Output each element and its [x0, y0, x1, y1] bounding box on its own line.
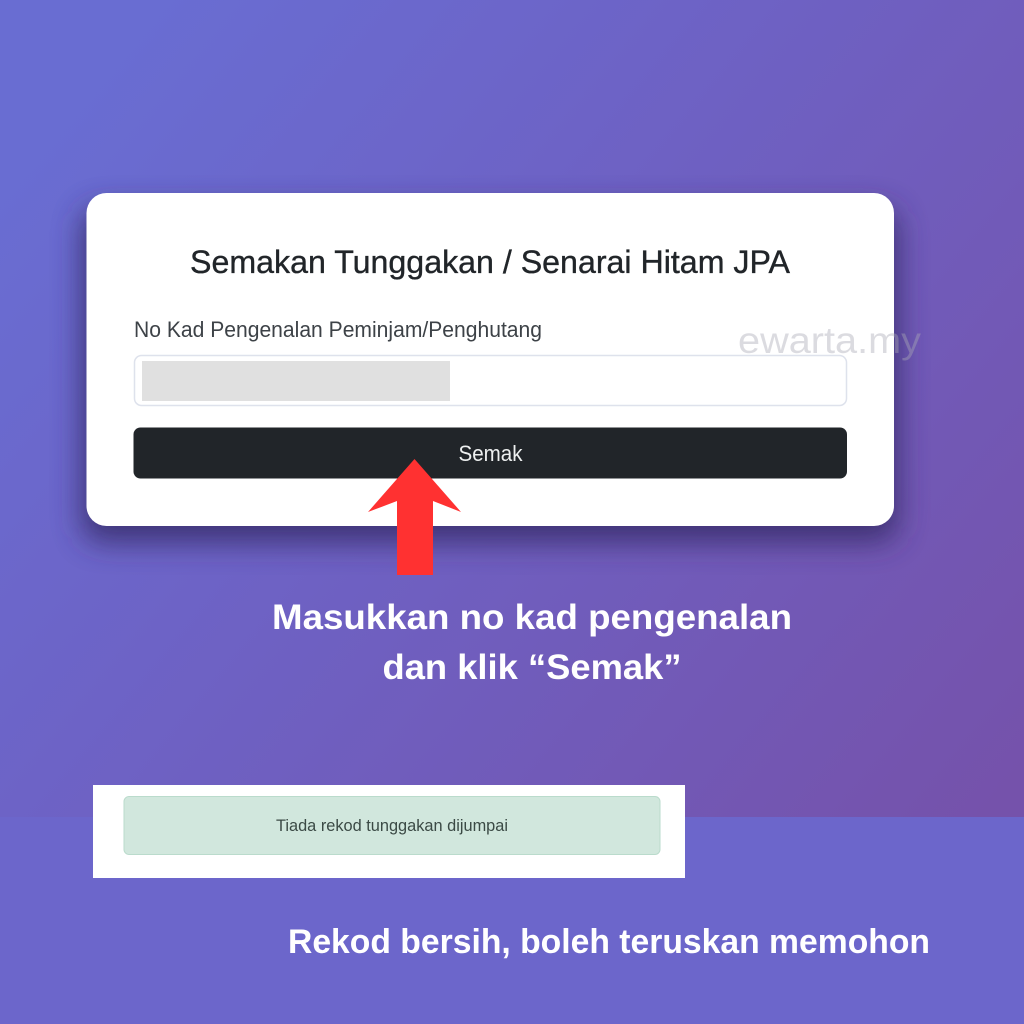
background lower band	[0, 817, 1024, 1024]
result message: Tiada rekod tunggakan dijumpai	[276, 817, 508, 835]
conclusion text: Rekod bersih, boleh teruskan memohon	[288, 923, 930, 961]
label: IC number: No Kad Pengenalan Peminjam/Penghutang	[134, 317, 542, 342]
button: Semak: Semak	[458, 441, 523, 466]
heading: form title: Semakan Tunggakan / Senarai Hitam JPA	[190, 244, 791, 280]
redacted input value	[142, 361, 450, 401]
card shadow	[82, 208, 898, 542]
input field	[134, 356, 846, 406]
instruction text	[272, 597, 792, 687]
panel: search form card	[86, 193, 894, 526]
result alert	[124, 796, 660, 854]
instruction text: Masukkan no kad pengenalan	[272, 597, 792, 637]
arrow: red up arrow	[368, 459, 461, 575]
panel: result screenshot	[93, 785, 685, 878]
button: Semak	[134, 428, 847, 478]
watermark: ewarta.my: ewarta.my	[738, 320, 922, 361]
instruction text: dan klik “Semak”	[382, 647, 682, 687]
background gradient	[0, 0, 1024, 817]
